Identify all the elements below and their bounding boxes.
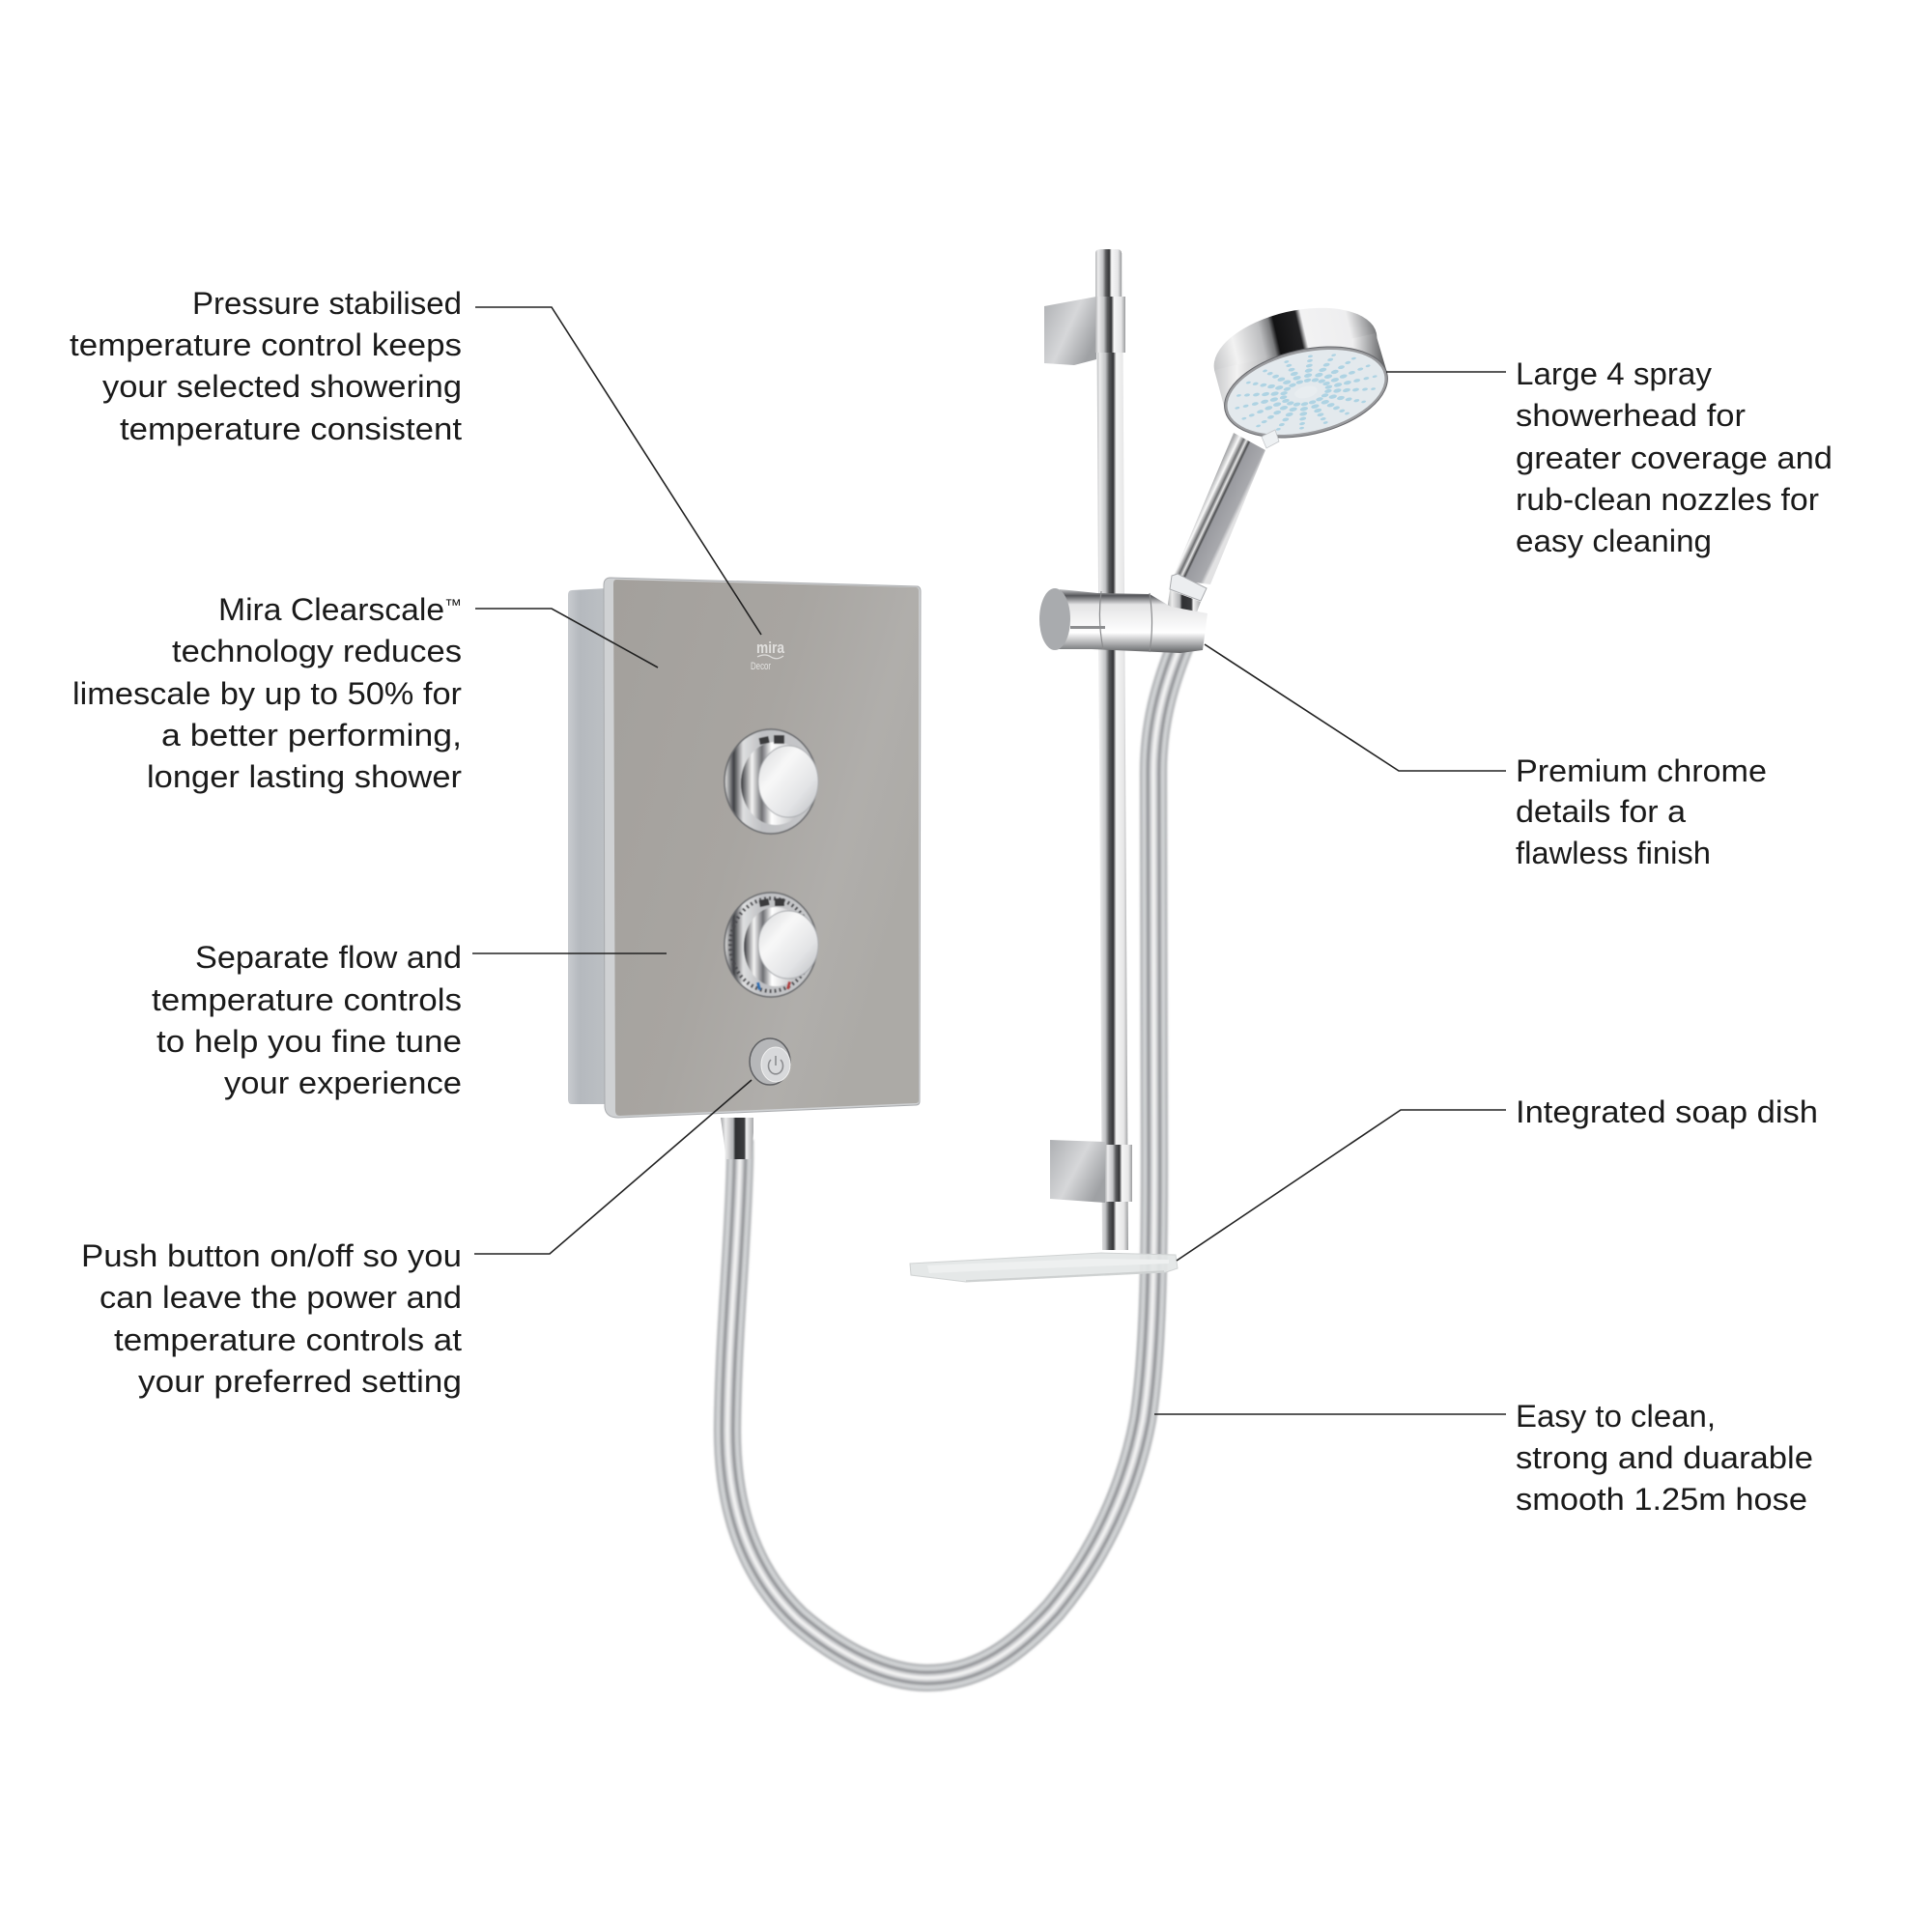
temperature control knob — [724, 893, 818, 997]
spray face — [1219, 336, 1393, 448]
chrome body — [1206, 294, 1387, 410]
text: separate controls — [152, 940, 462, 1100]
mira Decor logo: Decor — [751, 661, 771, 672]
text: push button: temperature controls at — [114, 1322, 462, 1357]
text: pressure stabilised — [70, 286, 462, 446]
arrow: push button — [474, 1080, 752, 1254]
mira Decor logo — [751, 639, 784, 672]
arrow: clearscale — [475, 609, 658, 668]
mira Decor logo: mira — [756, 639, 784, 657]
text: clearscale — [72, 592, 462, 794]
text: separate controls: temperature controls — [152, 982, 462, 1017]
arrow: showerhead — [1386, 371, 1506, 373]
upper rail collar — [1095, 297, 1125, 353]
arrow: soap dish — [1177, 1110, 1506, 1261]
text: hose: strong and duarable — [1516, 1440, 1813, 1475]
rail pole — [1096, 253, 1128, 1250]
text: showerhead: showerhead for — [1516, 398, 1746, 433]
callout lines — [472, 307, 1506, 1414]
white collar — [1170, 574, 1207, 601]
arrow: separate controls — [472, 952, 667, 954]
selector tab — [1262, 430, 1279, 448]
flow control knob — [724, 729, 818, 834]
text: clearscale: ™ — [444, 596, 462, 614]
text: chrome details — [1516, 753, 1767, 870]
text: pressure stabilised: Pressure stabilised — [192, 286, 462, 321]
text: clearscale: longer lasting shower — [147, 759, 462, 794]
slider clamp — [1039, 588, 1208, 653]
clamp end cap — [1039, 588, 1070, 650]
shower head — [1206, 294, 1397, 452]
text: pressure stabilised: your selected showering — [102, 369, 462, 404]
text: hose: Easy to clean, — [1516, 1399, 1716, 1434]
sliding rail — [1044, 249, 1132, 1250]
neck — [1167, 590, 1201, 620]
lower rail collar — [1105, 1145, 1132, 1202]
text: separate controls: Separate flow and — [195, 940, 462, 975]
text: showerhead: Large 4 spray — [1516, 356, 1712, 391]
text: showerhead: easy cleaning — [1516, 524, 1712, 558]
text: push button: Push button on/off so you — [81, 1238, 462, 1273]
text: showerhead: greater coverage and — [1516, 440, 1833, 475]
lower wall bracket — [1050, 1140, 1105, 1203]
power button — [750, 1038, 790, 1085]
text: chrome details: details for a — [1516, 794, 1686, 829]
text: push button: your preferred setting — [138, 1364, 462, 1399]
text: soap dish: Integrated soap dish — [1516, 1094, 1818, 1129]
outlet pipe — [721, 1118, 753, 1159]
text: clearscale: technology reduces — [172, 634, 462, 668]
text: clearscale: a better performing, — [161, 718, 462, 753]
flexible hose — [727, 645, 1180, 1678]
rim — [1215, 332, 1397, 452]
text: hose — [1516, 1399, 1813, 1517]
text: chrome details: flawless finish — [1516, 836, 1711, 870]
text: push button — [81, 1238, 462, 1399]
text: chrome details: Premium chrome — [1516, 753, 1767, 788]
handset handle — [1167, 433, 1265, 620]
text: separate controls: to help you fine tune — [156, 1024, 462, 1059]
text: clearscale: limescale by up to 50% for — [72, 676, 462, 711]
arrow: pressure stabilised — [475, 307, 761, 635]
text: clearscale: Mira Clearscale — [218, 592, 433, 627]
icon: power symbol — [769, 1056, 783, 1074]
text: showerhead — [1516, 356, 1833, 558]
soap dish — [910, 1253, 1178, 1282]
arrow: hose — [1154, 1413, 1506, 1415]
glass front panel — [613, 580, 919, 1116]
text: showerhead: rub-clean nozzles for — [1516, 482, 1819, 517]
text: separate controls: your experience — [224, 1065, 462, 1100]
text: hose: smooth 1.25m hose — [1516, 1482, 1807, 1517]
chrome frame edge — [604, 578, 921, 1118]
rear casing — [568, 588, 607, 1104]
text: pressure stabilised: temperature consistent — [120, 412, 462, 446]
upper wall bracket — [1044, 297, 1096, 365]
rail top cap — [1095, 249, 1122, 299]
text: pressure stabilised: temperature control keeps — [70, 327, 462, 362]
shower unit — [568, 578, 921, 1118]
text: push button: can leave the power and — [99, 1280, 462, 1315]
arrow: chrome details — [1205, 644, 1506, 771]
nozzles — [1227, 341, 1385, 443]
